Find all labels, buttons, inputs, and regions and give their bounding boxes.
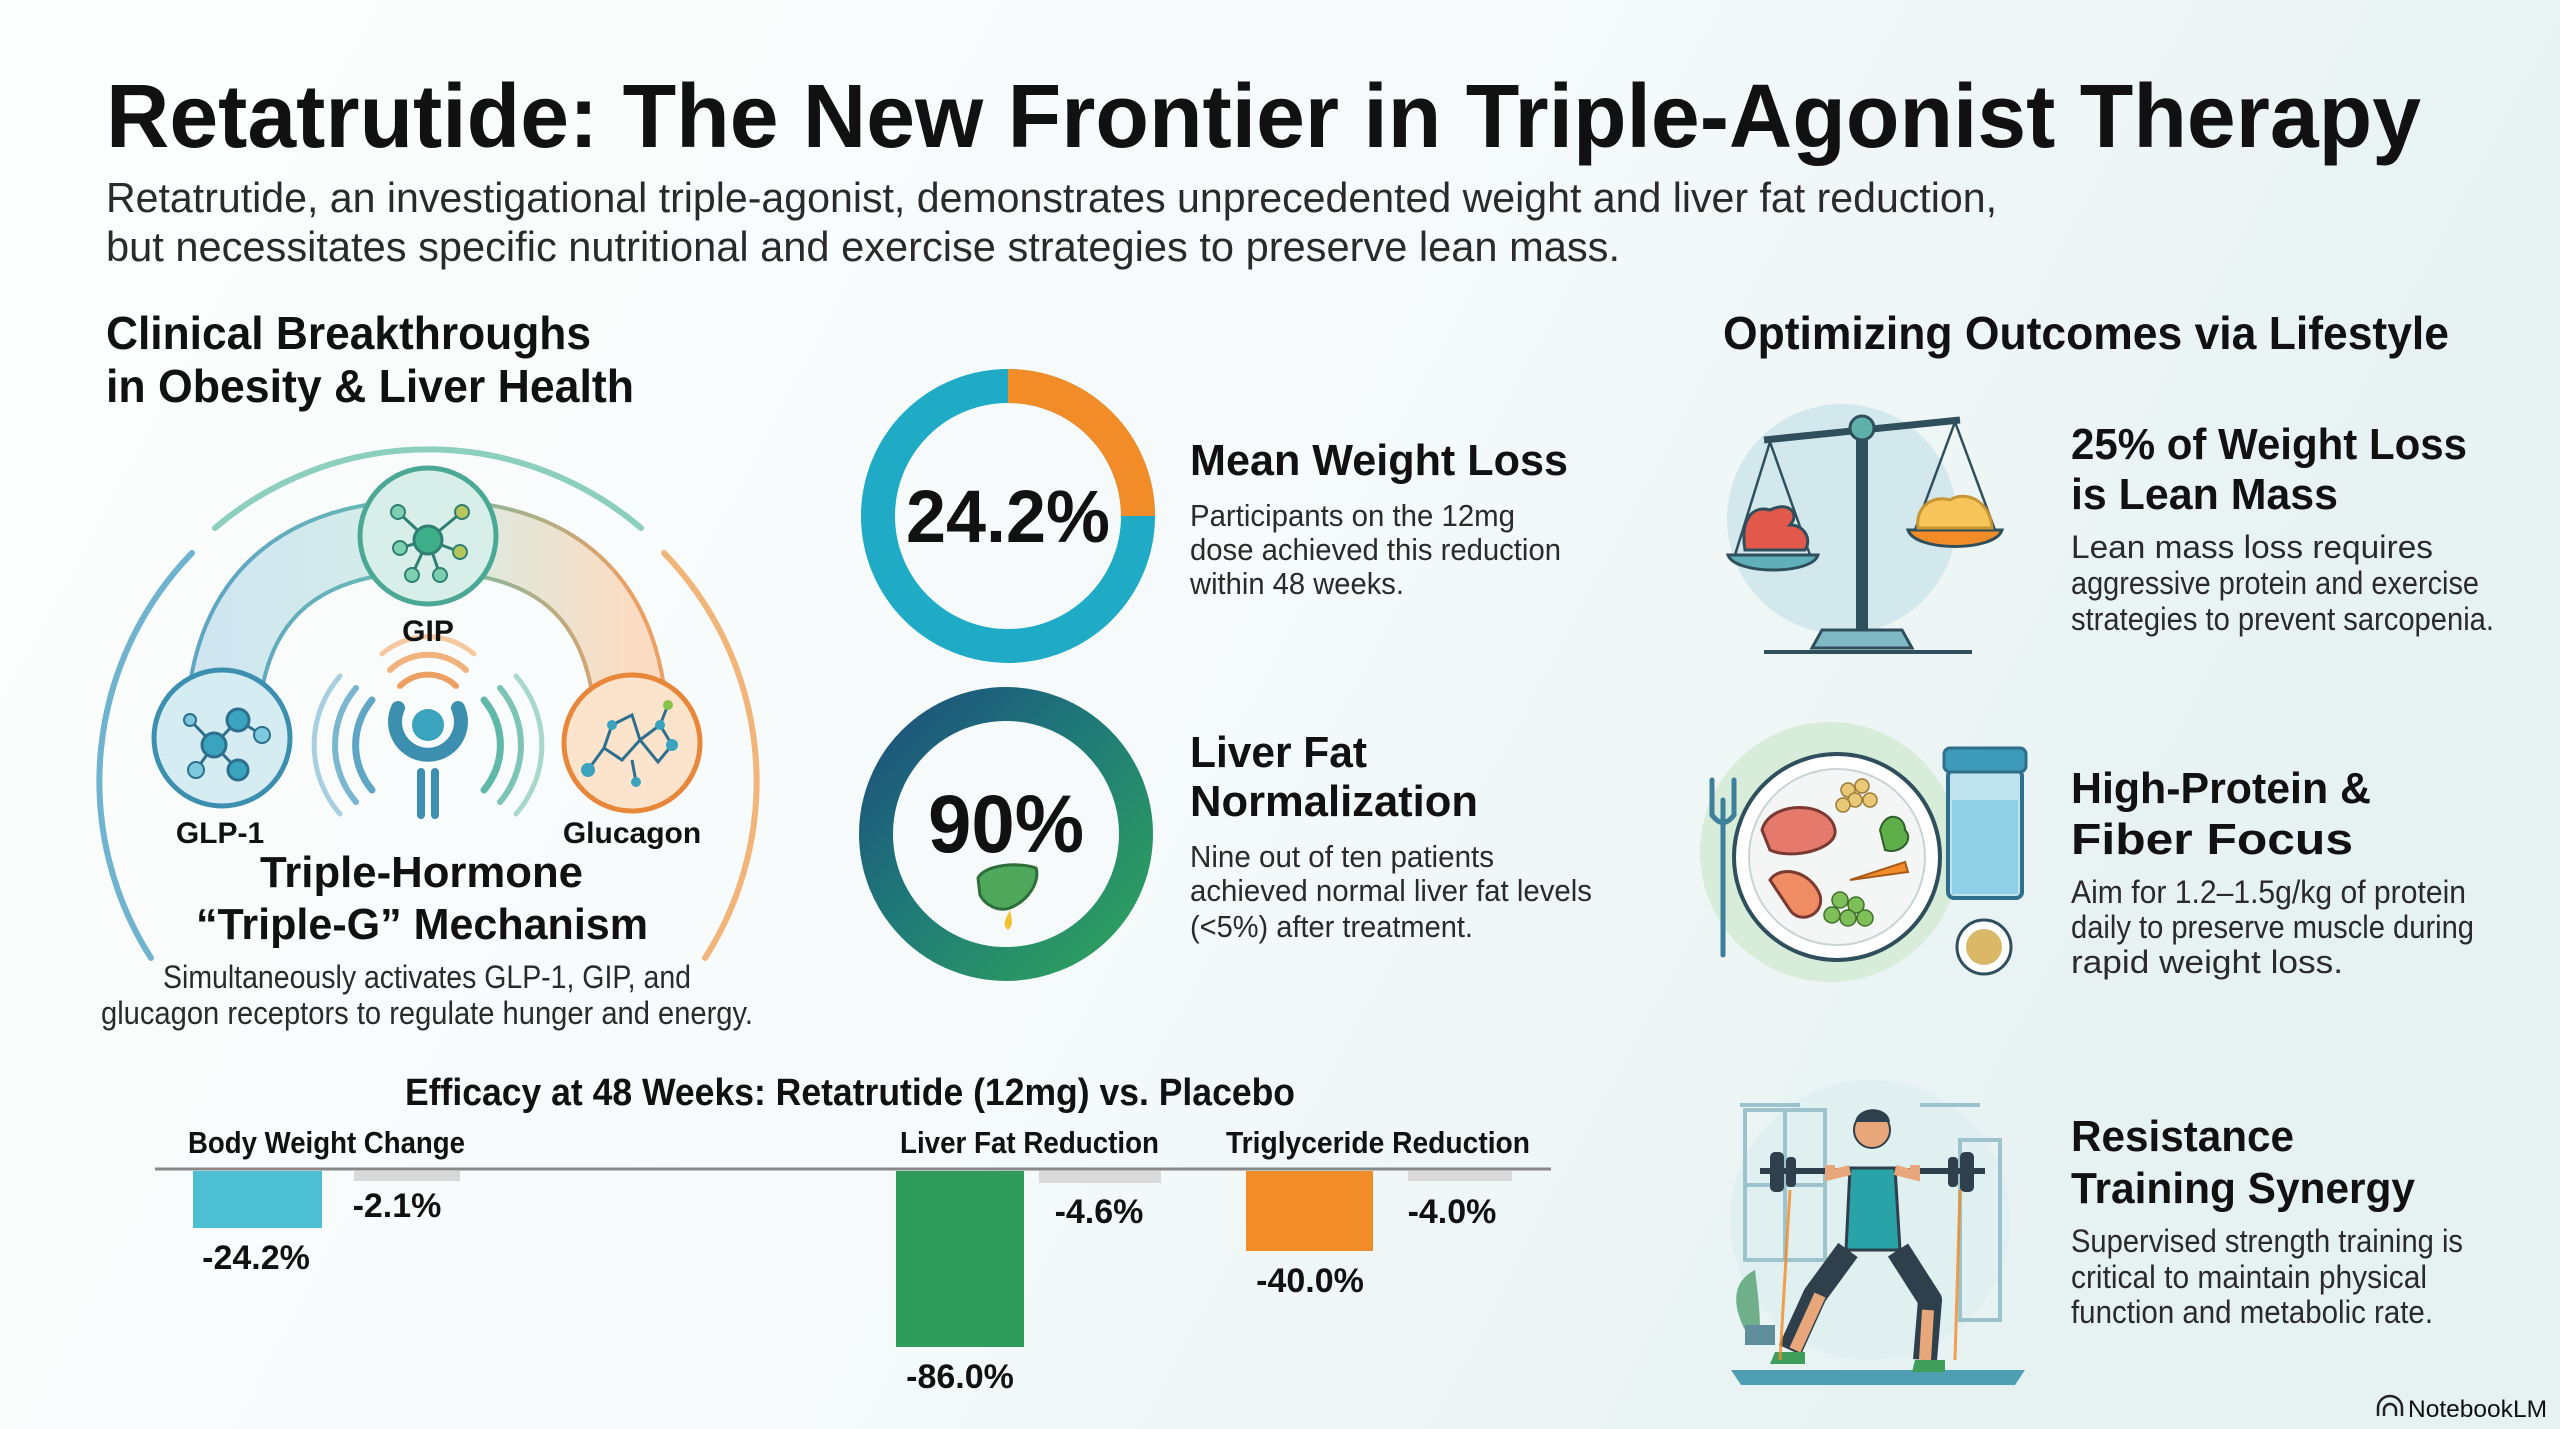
icon: glucagon molecule bbox=[564, 675, 700, 811]
text: liver fat normalization: Liver Fat bbox=[1190, 728, 1367, 777]
subtitle: but necessitates specific nutritional and exercise strategies to preserve lean mass. bbox=[106, 223, 1620, 270]
value labels: -4.6% bbox=[1055, 1193, 1143, 1231]
text: high protein & fiber bbox=[2071, 764, 2474, 980]
text: lean mass: is Lean Mass bbox=[2071, 470, 2338, 519]
text: lean mass: aggressive protein and exercise bbox=[2071, 565, 2479, 601]
text: high protein & fiber: Aim for 1.2–1.5g/kg of protein bbox=[2071, 874, 2466, 910]
mechanism text block: glucagon receptors to regulate hunger and energy. bbox=[101, 995, 753, 1031]
category labels: Triglyceride Reduction bbox=[1226, 1125, 1530, 1160]
outer arcs bbox=[99, 449, 757, 958]
icon: receptor with signal waves bbox=[314, 637, 542, 815]
text: liver fat normalization bbox=[1190, 728, 1592, 944]
icon: high-protein plate bbox=[1700, 722, 2026, 982]
donut: mean weight loss 24.2%: 24.2% bbox=[906, 475, 1110, 558]
text: resistance training: function and metabolic rate. bbox=[2071, 1294, 2433, 1330]
text: resistance training bbox=[2071, 1112, 2463, 1330]
panel: triple-G mechanism diagram: GLP-1 bbox=[176, 817, 264, 850]
connecting band bbox=[222, 536, 632, 743]
icon: balance scale (muscle vs fat) bbox=[1727, 404, 2002, 652]
text: resistance training: Supervised strength training is bbox=[2071, 1223, 2463, 1259]
chart title: Efficacy at 48 Weeks: Retatrutide (12mg) vs. Placebo bbox=[405, 1072, 1295, 1114]
text: liver fat normalization: Normalization bbox=[1190, 777, 1478, 826]
panel: triple-G mechanism diagram: Glucagon bbox=[563, 817, 701, 850]
icon: resistance training figure bbox=[1730, 1080, 2025, 1385]
mechanism text block: Triple-Hormone bbox=[260, 848, 583, 897]
text: resistance training: critical to maintain physical bbox=[2071, 1259, 2427, 1295]
icon: liver with drop bbox=[978, 865, 1037, 930]
subtitle: Retatrutide, an investigational triple-agonist, demonstrates unprecedented weight and liver fat reduction, bbox=[106, 174, 1997, 221]
heading: clinical breakthroughs: in Obesity & Liver Health bbox=[106, 360, 634, 412]
donut: liver fat 90% bbox=[876, 704, 1136, 964]
text: mean weight loss: Mean Weight Loss bbox=[1190, 436, 1568, 485]
mechanism text block: Simultaneously activates GLP-1, GIP, and bbox=[163, 959, 691, 995]
bar chart: efficacy at 48 weeks bbox=[155, 1072, 1551, 1396]
text: high protein & fiber: rapid weight loss. bbox=[2071, 944, 2343, 980]
category labels bbox=[188, 1125, 1530, 1160]
heading: clinical breakthroughs bbox=[106, 307, 634, 412]
donut: mean weight loss 24.2% bbox=[878, 386, 1138, 646]
heading: clinical breakthroughs: Clinical Breakthroughs bbox=[106, 307, 591, 359]
icon: GIP molecule bbox=[360, 468, 496, 604]
text: mean weight loss bbox=[1189, 436, 1568, 601]
mechanism text block: “Triple-G” Mechanism bbox=[196, 900, 648, 949]
value labels: -2.1% bbox=[353, 1187, 441, 1225]
mechanism text block bbox=[101, 848, 753, 1031]
text: resistance training: Training Synergy bbox=[2071, 1164, 2416, 1213]
title: Retatrutide: The New Frontier in Triple-Agonist Therapy bbox=[106, 67, 2421, 167]
panel: triple-G mechanism diagram bbox=[99, 449, 757, 958]
text: high protein & fiber: Fiber Focus bbox=[2071, 815, 2353, 864]
donut: liver fat 90%: 90% bbox=[928, 779, 1084, 870]
labels: GIP bbox=[402, 615, 454, 648]
text: high protein & fiber: daily to preserve muscle during bbox=[2071, 909, 2474, 945]
text: lean mass: 25% of Weight Loss bbox=[2071, 420, 2467, 469]
text: lean mass: strategies to prevent sarcopenia. bbox=[2071, 601, 2494, 637]
value labels: -40.0% bbox=[1256, 1262, 1364, 1300]
icon: GLP-1 molecule bbox=[154, 670, 290, 806]
text: high protein & fiber: High-Protein & bbox=[2071, 764, 2371, 813]
text: liver fat normalization: Nine out of ten patients bbox=[1190, 839, 1494, 874]
bars bbox=[193, 1171, 1512, 1347]
text: mean weight loss: Participants on the 12mg bbox=[1190, 498, 1515, 533]
value labels bbox=[202, 1187, 1496, 1396]
value labels: -86.0% bbox=[906, 1358, 1014, 1396]
heading: optimizing outcomes: Optimizing Outcomes via Lifestyle bbox=[1723, 307, 2449, 359]
text: resistance training: Resistance bbox=[2071, 1112, 2294, 1161]
value labels: -4.0% bbox=[1408, 1193, 1496, 1231]
value labels: -24.2% bbox=[202, 1239, 310, 1277]
category labels: Liver Fat Reduction bbox=[900, 1125, 1159, 1160]
subtitle bbox=[106, 174, 1997, 270]
category labels: Body Weight Change bbox=[188, 1125, 465, 1160]
text: mean weight loss: dose achieved this reduction bbox=[1190, 532, 1561, 567]
text: lean mass bbox=[2071, 420, 2494, 637]
text: lean mass: Lean mass loss requires bbox=[2071, 529, 2433, 565]
text: liver fat normalization: (<5%) after treatment. bbox=[1190, 909, 1473, 944]
logo: NotebookLM: NotebookLM bbox=[2408, 1396, 2547, 1423]
text: mean weight loss: within 48 weeks. bbox=[1189, 566, 1404, 601]
text: liver fat normalization: achieved normal liver fat levels bbox=[1190, 873, 1592, 908]
